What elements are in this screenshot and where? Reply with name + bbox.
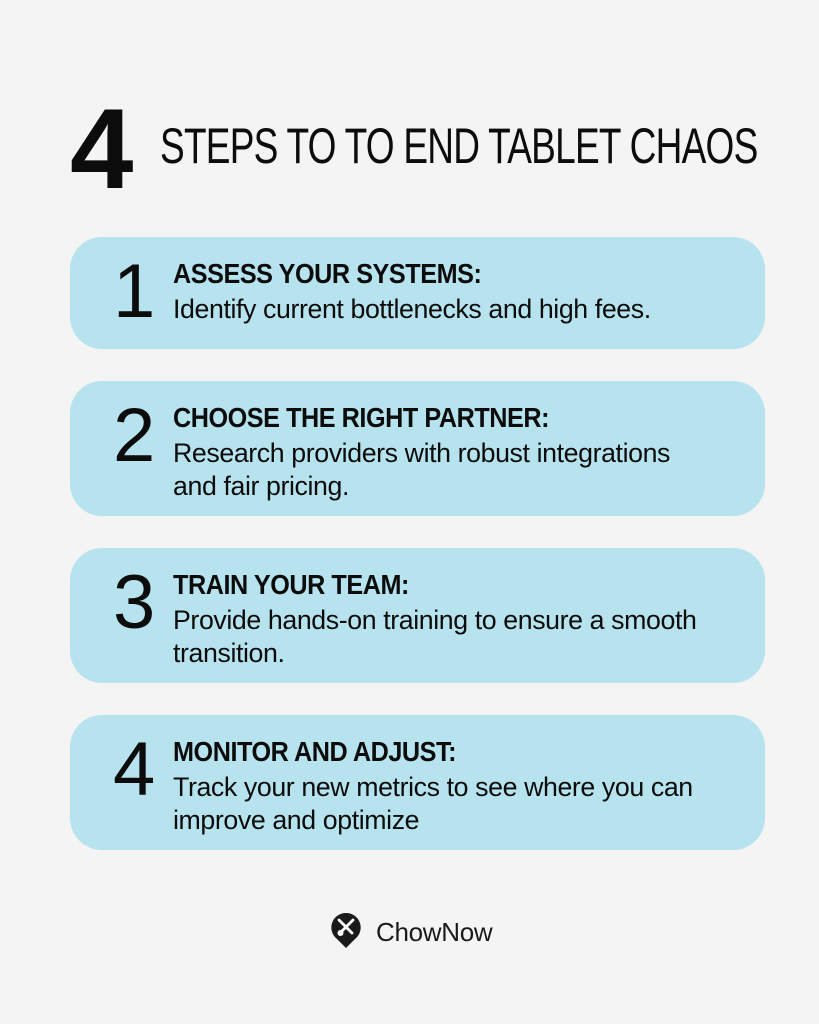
panel: step 2 bbox=[70, 381, 765, 516]
step 1 body: Identify current bottlenecks and high fees. bbox=[173, 294, 651, 324]
step 1 heading: ASSESS YOUR SYSTEMS: bbox=[173, 258, 481, 289]
step number 2: 2 bbox=[113, 393, 155, 478]
panel: step 4 bbox=[70, 715, 765, 850]
panel: step 1 bbox=[70, 237, 765, 349]
step number 4: 4 bbox=[113, 727, 155, 812]
step number 3: 3 bbox=[113, 560, 155, 645]
panel: step 3 bbox=[70, 548, 765, 683]
step number 1: 1 bbox=[113, 249, 155, 334]
step 4 body: Track your new metrics to see where you can bbox=[173, 772, 693, 802]
big number 4: 4 bbox=[70, 86, 133, 213]
step 2 body bbox=[173, 438, 670, 501]
title text: STEPS TO TO END TABLET CHAOS bbox=[160, 118, 758, 174]
step 3 heading: TRAIN YOUR TEAM: bbox=[173, 569, 409, 600]
icon: fork and knife pin bbox=[331, 913, 361, 948]
step 4 body bbox=[173, 772, 693, 835]
step 2 body: and fair pricing. bbox=[173, 471, 349, 501]
step 3 body: Provide hands-on training to ensure a smooth bbox=[173, 605, 696, 635]
step 4 body: improve and optimize bbox=[173, 805, 419, 835]
logo text: ChowNow bbox=[376, 917, 492, 947]
step 3 body bbox=[173, 605, 696, 668]
step 3 body: transition. bbox=[173, 638, 285, 668]
step 2 body: Research providers with robust integrations bbox=[173, 438, 670, 468]
step 4 heading: MONITOR AND ADJUST: bbox=[173, 736, 456, 767]
logo: ChowNow bbox=[331, 913, 493, 948]
title bbox=[70, 86, 758, 213]
step 2 heading: CHOOSE THE RIGHT PARTNER: bbox=[173, 402, 549, 433]
